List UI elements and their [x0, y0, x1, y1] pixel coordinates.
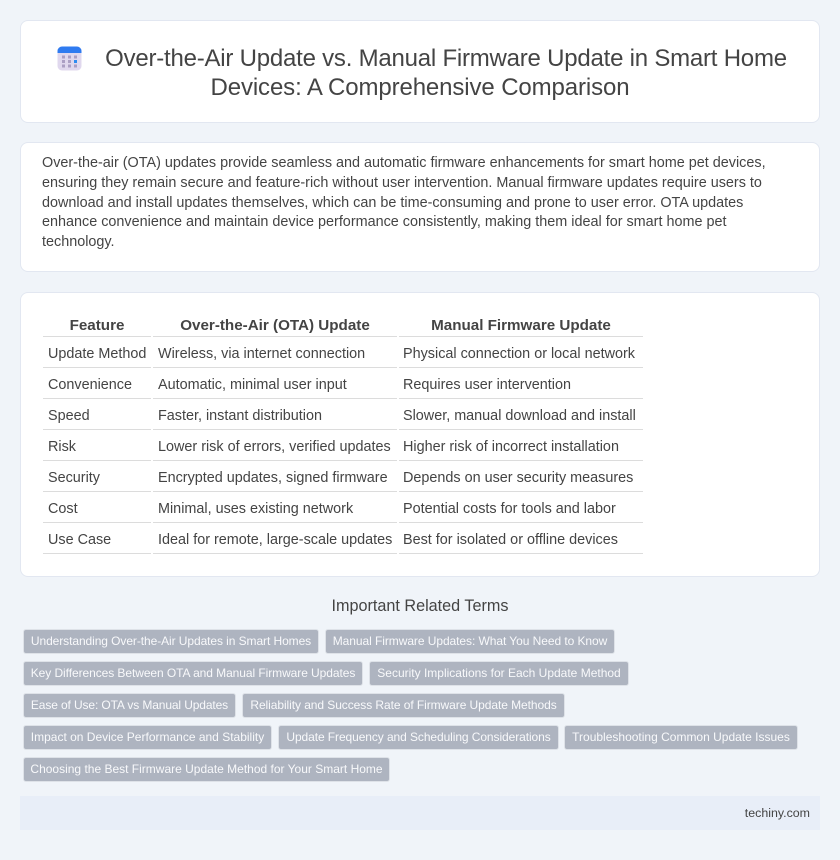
comparison table: Ideal for remote, large-scale updates	[158, 532, 392, 548]
related terms tags	[23, 629, 798, 782]
comparison table: Physical connection or local network	[403, 346, 635, 362]
text block: summary: Over-the-air (OTA) updates provide seamless and automatic firmware enhancements for smart home pet devices,	[42, 155, 766, 171]
tag	[23, 757, 390, 782]
comparison table: Manual Firmware Update	[431, 316, 611, 334]
comparison table: Higher risk of incorrect installation	[403, 438, 619, 454]
comparison table: Encrypted updates, signed firmware	[158, 470, 388, 486]
comparison table: Use Case	[48, 532, 111, 548]
tag: Ease of Use: OTA vs Manual Updates	[31, 698, 228, 712]
comparison table: Slower, manual download and install	[403, 408, 636, 424]
comparison table: Convenience	[48, 376, 132, 392]
comparison table	[43, 316, 643, 554]
text block: summary: download and install updates themselves, which can be time-consuming and prone to user error. OTA updates	[42, 195, 743, 211]
tag	[242, 693, 565, 718]
section heading: related terms: Important Related Terms	[332, 597, 508, 615]
comparison table: Best for isolated or offline devices	[403, 532, 618, 548]
comparison table: Risk	[48, 438, 76, 454]
comparison table: Speed	[48, 408, 90, 424]
title panel	[20, 20, 820, 123]
comparison table: Security	[48, 470, 100, 486]
tag	[278, 725, 559, 750]
footer: techiny.com	[745, 806, 810, 820]
comparison table: Wireless, via internet connection	[158, 346, 365, 362]
comparison table: Cost	[48, 500, 78, 516]
tag: Understanding Over-the-Air Updates in Smart Homes	[31, 634, 311, 648]
tag: Key Differences Between OTA and Manual Firmware Updates	[31, 666, 355, 680]
tag: Choosing the Best Firmware Update Method for Your Smart Home	[30, 762, 383, 776]
heading	[105, 45, 787, 101]
tag: Security Implications for Each Update Method	[377, 666, 621, 680]
tag: Manual Firmware Updates: What You Need to Know	[333, 634, 607, 648]
panel: summary text	[20, 142, 820, 272]
comparison table: Faster, instant distribution	[158, 408, 322, 424]
comparison table: Over-the-Air (OTA) Update	[180, 316, 370, 334]
text block: summary: technology.	[42, 234, 115, 250]
comparison table: Minimal, uses existing network	[158, 500, 353, 516]
tag: Reliability and Success Rate of Firmware Update Methods	[250, 698, 557, 712]
heading: Over-the-Air Update vs. Manual Firmware Update in Smart Home	[105, 45, 787, 72]
comparison table: Requires user intervention	[403, 376, 571, 392]
text block: summary: ensuring they remain secure and feature-rich without user intervention. Manual firmware updates require users to	[42, 175, 762, 191]
text block: summary: enhance convenience and maintain device performance consistently, making them ideal for smart home pet	[42, 214, 726, 230]
tag: Update Frequency and Scheduling Considerations	[286, 730, 551, 744]
tag	[23, 725, 272, 750]
panel: comparison table	[20, 292, 820, 577]
comparison table: Potential costs for tools and labor	[403, 500, 616, 516]
tag: Impact on Device Performance and Stability	[31, 730, 264, 744]
tag	[23, 693, 236, 718]
tag: Troubleshooting Common Update Issues	[572, 730, 790, 744]
comparison table: Automatic, minimal user input	[158, 376, 347, 392]
tag	[369, 661, 629, 686]
comparison table: Depends on user security measures	[403, 470, 633, 486]
comparison table: Update Method	[48, 346, 146, 362]
tag	[23, 629, 319, 654]
tag	[325, 629, 615, 654]
comparison table: Feature	[70, 316, 124, 334]
heading: Devices: A Comprehensive Comparison	[210, 74, 630, 101]
comparison table: Lower risk of errors, verified updates	[158, 438, 391, 454]
text block: summary	[42, 155, 766, 250]
tag	[23, 661, 363, 686]
footer	[20, 796, 820, 830]
icon: calendar	[58, 46, 82, 70]
tag	[564, 725, 798, 750]
